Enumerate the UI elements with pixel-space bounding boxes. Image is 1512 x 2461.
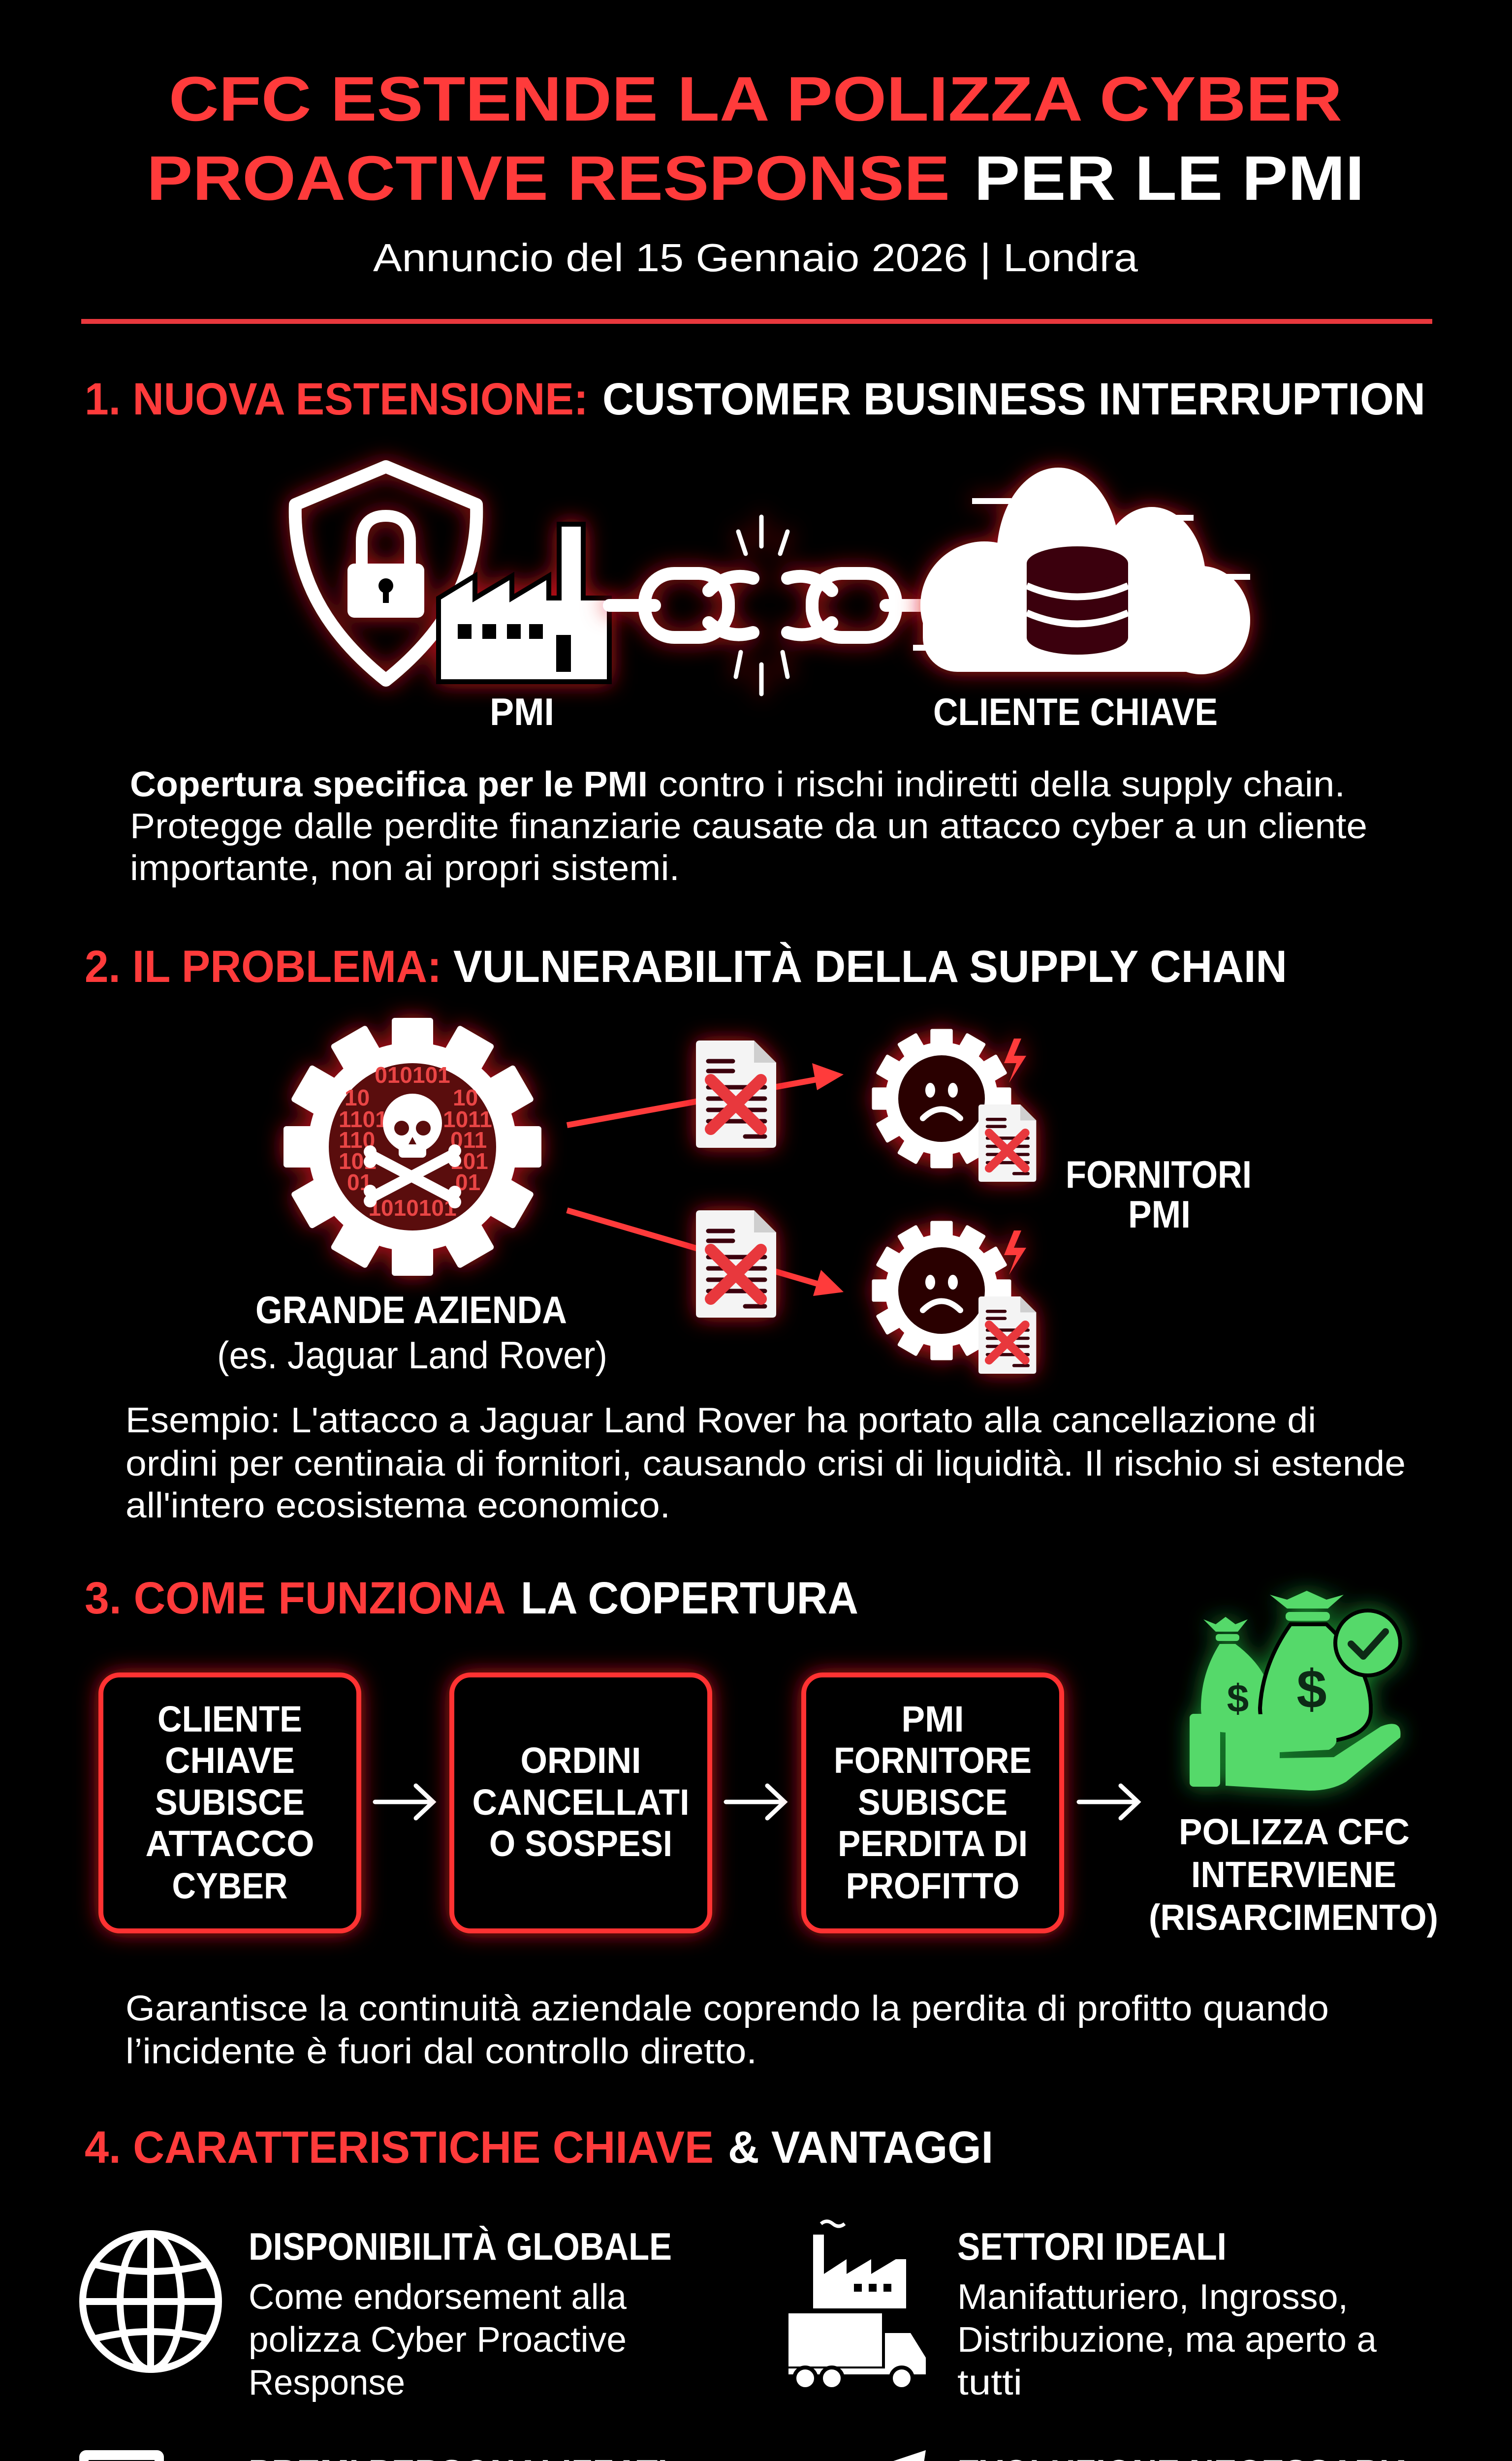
- text block: section 1 description: contro i rischi indiretti della supply chain.: [659, 765, 1345, 804]
- flow box 2: CANCELLATI: [472, 1782, 689, 1823]
- icon: factory and truck: [788, 2221, 926, 2389]
- label: POLIZZA CFC INTERVIENE: INTERVIENE: [1191, 1854, 1396, 1895]
- icon: sad supplier gears: [872, 1029, 1036, 1374]
- heading: section 1: 1. NUOVA ESTENSIONE:: [85, 374, 588, 424]
- icon: cancelled order documents: [696, 1041, 776, 1318]
- text block: section 2 example: ordini per centinaia di fornitori, causando crisi di liquidità. Il rischio si estende: [126, 1444, 1406, 1483]
- icon: broken chain: [609, 517, 925, 694]
- title: CFC ESTENDE LA POLIZZA CYBER: [169, 64, 1342, 134]
- icon: calculator and scales: [79, 2450, 221, 2461]
- label: GRANDE AZIENDA: (es. Jaguar Land Rover): [217, 1333, 607, 1377]
- icon: hacked gear with skull: [284, 1018, 541, 1276]
- label: GRANDE AZIENDA: GRANDE AZIENDA: [255, 1288, 567, 1331]
- feature: settori ideali: SETTORI IDEALI: [957, 2225, 1227, 2268]
- text block: section 3 summary: Garantisce la continuità aziendale coprendo la perdita di profitto quando: [126, 1989, 1329, 2028]
- heading: section 2: VULNERABILITÀ DELLA SUPPLY CHAIN: [453, 942, 1287, 992]
- flow box 2: O SOSPESI: [489, 1823, 672, 1864]
- icon: hacked gear with skull: 01: [455, 1169, 480, 1195]
- title: [147, 64, 1364, 214]
- arrow 3: [1079, 1786, 1138, 1818]
- label: FORNITORI PMI: PMI: [1128, 1193, 1191, 1236]
- heading: section 3: LA COPERTURA: [521, 1573, 858, 1623]
- flow box 3: SUBISCE: [858, 1782, 1008, 1823]
- heading: section 2: [85, 942, 1287, 992]
- label: POLIZZA CFC INTERVIENE: POLIZZA CFC: [1179, 1811, 1410, 1852]
- icon: hacked gear with skull: 101: [339, 1148, 377, 1174]
- icon: money bags on hand (green): $: [1227, 1676, 1249, 1720]
- text block: section 1 description: importante, non ai propri sistemi.: [130, 849, 680, 888]
- icon: hacked gear with skull: 1101: [339, 1106, 388, 1132]
- flow box 3: FORNITORE: [834, 1740, 1032, 1781]
- flow box 3: PROFITTO: [846, 1865, 1020, 1906]
- flow box 3: PERDITA DI: [838, 1823, 1028, 1864]
- flow box 1: CHIAVE: [165, 1740, 295, 1781]
- text block: section 2 example: Esempio: L'attacco a Jaguar Land Rover ha portato alla cancellazione di: [126, 1401, 1316, 1440]
- text block: section 1 description: Copertura specifica per le PMI: [130, 765, 648, 804]
- icon: growth chart: [786, 2450, 926, 2461]
- icon: hacked gear with skull: 1011: [443, 1106, 492, 1132]
- icon: hacked gear with skull: 110: [339, 1127, 375, 1153]
- flow box 2: ORDINI: [521, 1740, 641, 1781]
- heading: section 2: 2. IL PROBLEMA:: [85, 942, 441, 992]
- title: PER LE PMI: [974, 143, 1364, 214]
- label: GRANDE AZIENDA: [217, 1288, 607, 1377]
- icon: hacked gear with skull: 10: [453, 1085, 478, 1110]
- feature: settori ideali: [957, 2225, 1377, 2402]
- arrow 2: [726, 1786, 785, 1818]
- feature: settori ideali: tutti: [957, 2363, 1022, 2402]
- icon: hacked gear with skull: 011: [450, 1127, 487, 1153]
- text block: section 1 description: [130, 765, 1367, 888]
- flow box 1: CYBER: [172, 1865, 287, 1906]
- feature: settori ideali: Manifatturiero, Ingrosso,: [957, 2277, 1348, 2317]
- heading: section 1: [85, 374, 1425, 424]
- icon: shield with padlock and factory: [295, 467, 609, 682]
- icon: money bags on hand (green): [1190, 1591, 1401, 1791]
- arrows: to suppliers: [567, 1063, 844, 1296]
- flow box 1: [101, 1675, 359, 1931]
- heading: section 1: CUSTOMER BUSINESS INTERRUPTION: [602, 374, 1425, 424]
- feature: disponibilità globale: [249, 2225, 672, 2402]
- flow box 3: PMI: [902, 1699, 964, 1739]
- heading: section 4: 4. CARATTERISTICHE CHIAVE: [85, 2122, 714, 2173]
- label: POLIZZA CFC INTERVIENE: [1149, 1811, 1438, 1938]
- flow box 1: SUBISCE: [155, 1782, 305, 1823]
- text block: section 3 summary: l’incidente è fuori dal controllo diretto.: [126, 2032, 757, 2071]
- flow box 1: ATTACCO: [146, 1823, 314, 1864]
- title: PROACTIVE RESPONSE: [147, 143, 950, 214]
- flow box 1: CLIENTE: [158, 1699, 302, 1739]
- label: CLIENTE CHIAVE: CLIENTE CHIAVE: [933, 690, 1218, 733]
- text block: section 3 summary: [126, 1989, 1329, 2071]
- feature: disponibilità globale: Come endorsement alla: [249, 2277, 627, 2317]
- flow box 2: [452, 1675, 710, 1931]
- label: FORNITORI PMI: FORNITORI: [1066, 1153, 1252, 1196]
- icon: money bags on hand (green): $: [1296, 1659, 1327, 1720]
- icon: hacked gear with skull: 101: [450, 1148, 488, 1174]
- feature: disponibilità globale: DISPONIBILITÀ GLOBALE: [249, 2225, 672, 2268]
- flow box 3: [804, 1675, 1062, 1931]
- label: FORNITORI PMI: [1066, 1153, 1252, 1236]
- arrow 1: [375, 1786, 433, 1818]
- text block: section 2 example: [126, 1401, 1406, 1525]
- heading: section 3: [85, 1573, 858, 1623]
- heading: section 4: & VANTAGGI: [728, 2122, 993, 2173]
- subtitle: Annuncio del 15 Gennaio 2026 | Londra: [373, 236, 1138, 280]
- feature: disponibilità globale: polizza Cyber Proactive: [249, 2320, 627, 2360]
- feature: disponibilità globale: Response: [249, 2363, 405, 2402]
- icon: hacked gear with skull: 010101: [375, 1062, 450, 1088]
- text block: section 2 example: all'intero ecosistema economico.: [126, 1486, 670, 1525]
- icon: cloud with database: [913, 468, 1250, 674]
- icon: globe: [83, 2234, 219, 2369]
- icon: hacked gear with skull: 1010101: [368, 1195, 457, 1221]
- heading: section 3: 3. COME FUNZIONA: [85, 1573, 506, 1623]
- icon: hacked gear with skull: 10: [345, 1085, 370, 1110]
- feature: settori ideali: Distribuzione, ma aperto a: [957, 2320, 1377, 2360]
- text block: section 1 description: Protegge dalle perdite finanziarie causate da un attacco cyber a un cliente: [130, 807, 1367, 846]
- icon: hacked gear with skull: 01: [347, 1169, 372, 1195]
- label: POLIZZA CFC INTERVIENE: (RISARCIMENTO): [1149, 1897, 1438, 1938]
- label: PMI: PMI: [490, 690, 554, 733]
